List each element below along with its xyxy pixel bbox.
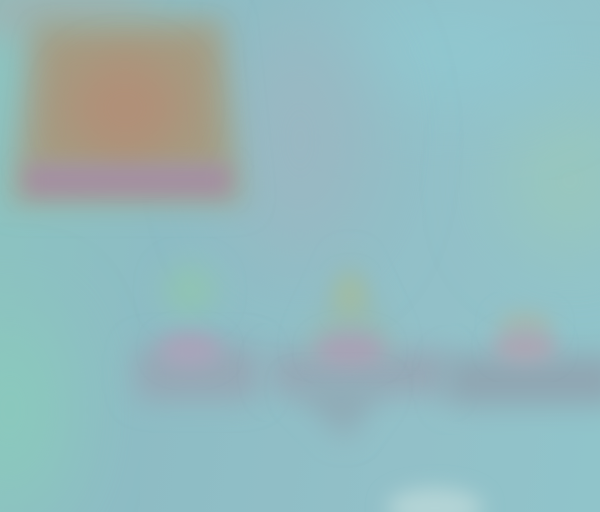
highlight: bottom glow (387, 488, 483, 512)
band: horizontal grey-blue strip (135, 345, 600, 405)
icon: left blurred figure (158, 266, 222, 368)
icon: centre blurred figure (290, 255, 395, 440)
icon: right blurred figure (493, 310, 557, 363)
panel: top-left blurred block (8, 15, 245, 205)
